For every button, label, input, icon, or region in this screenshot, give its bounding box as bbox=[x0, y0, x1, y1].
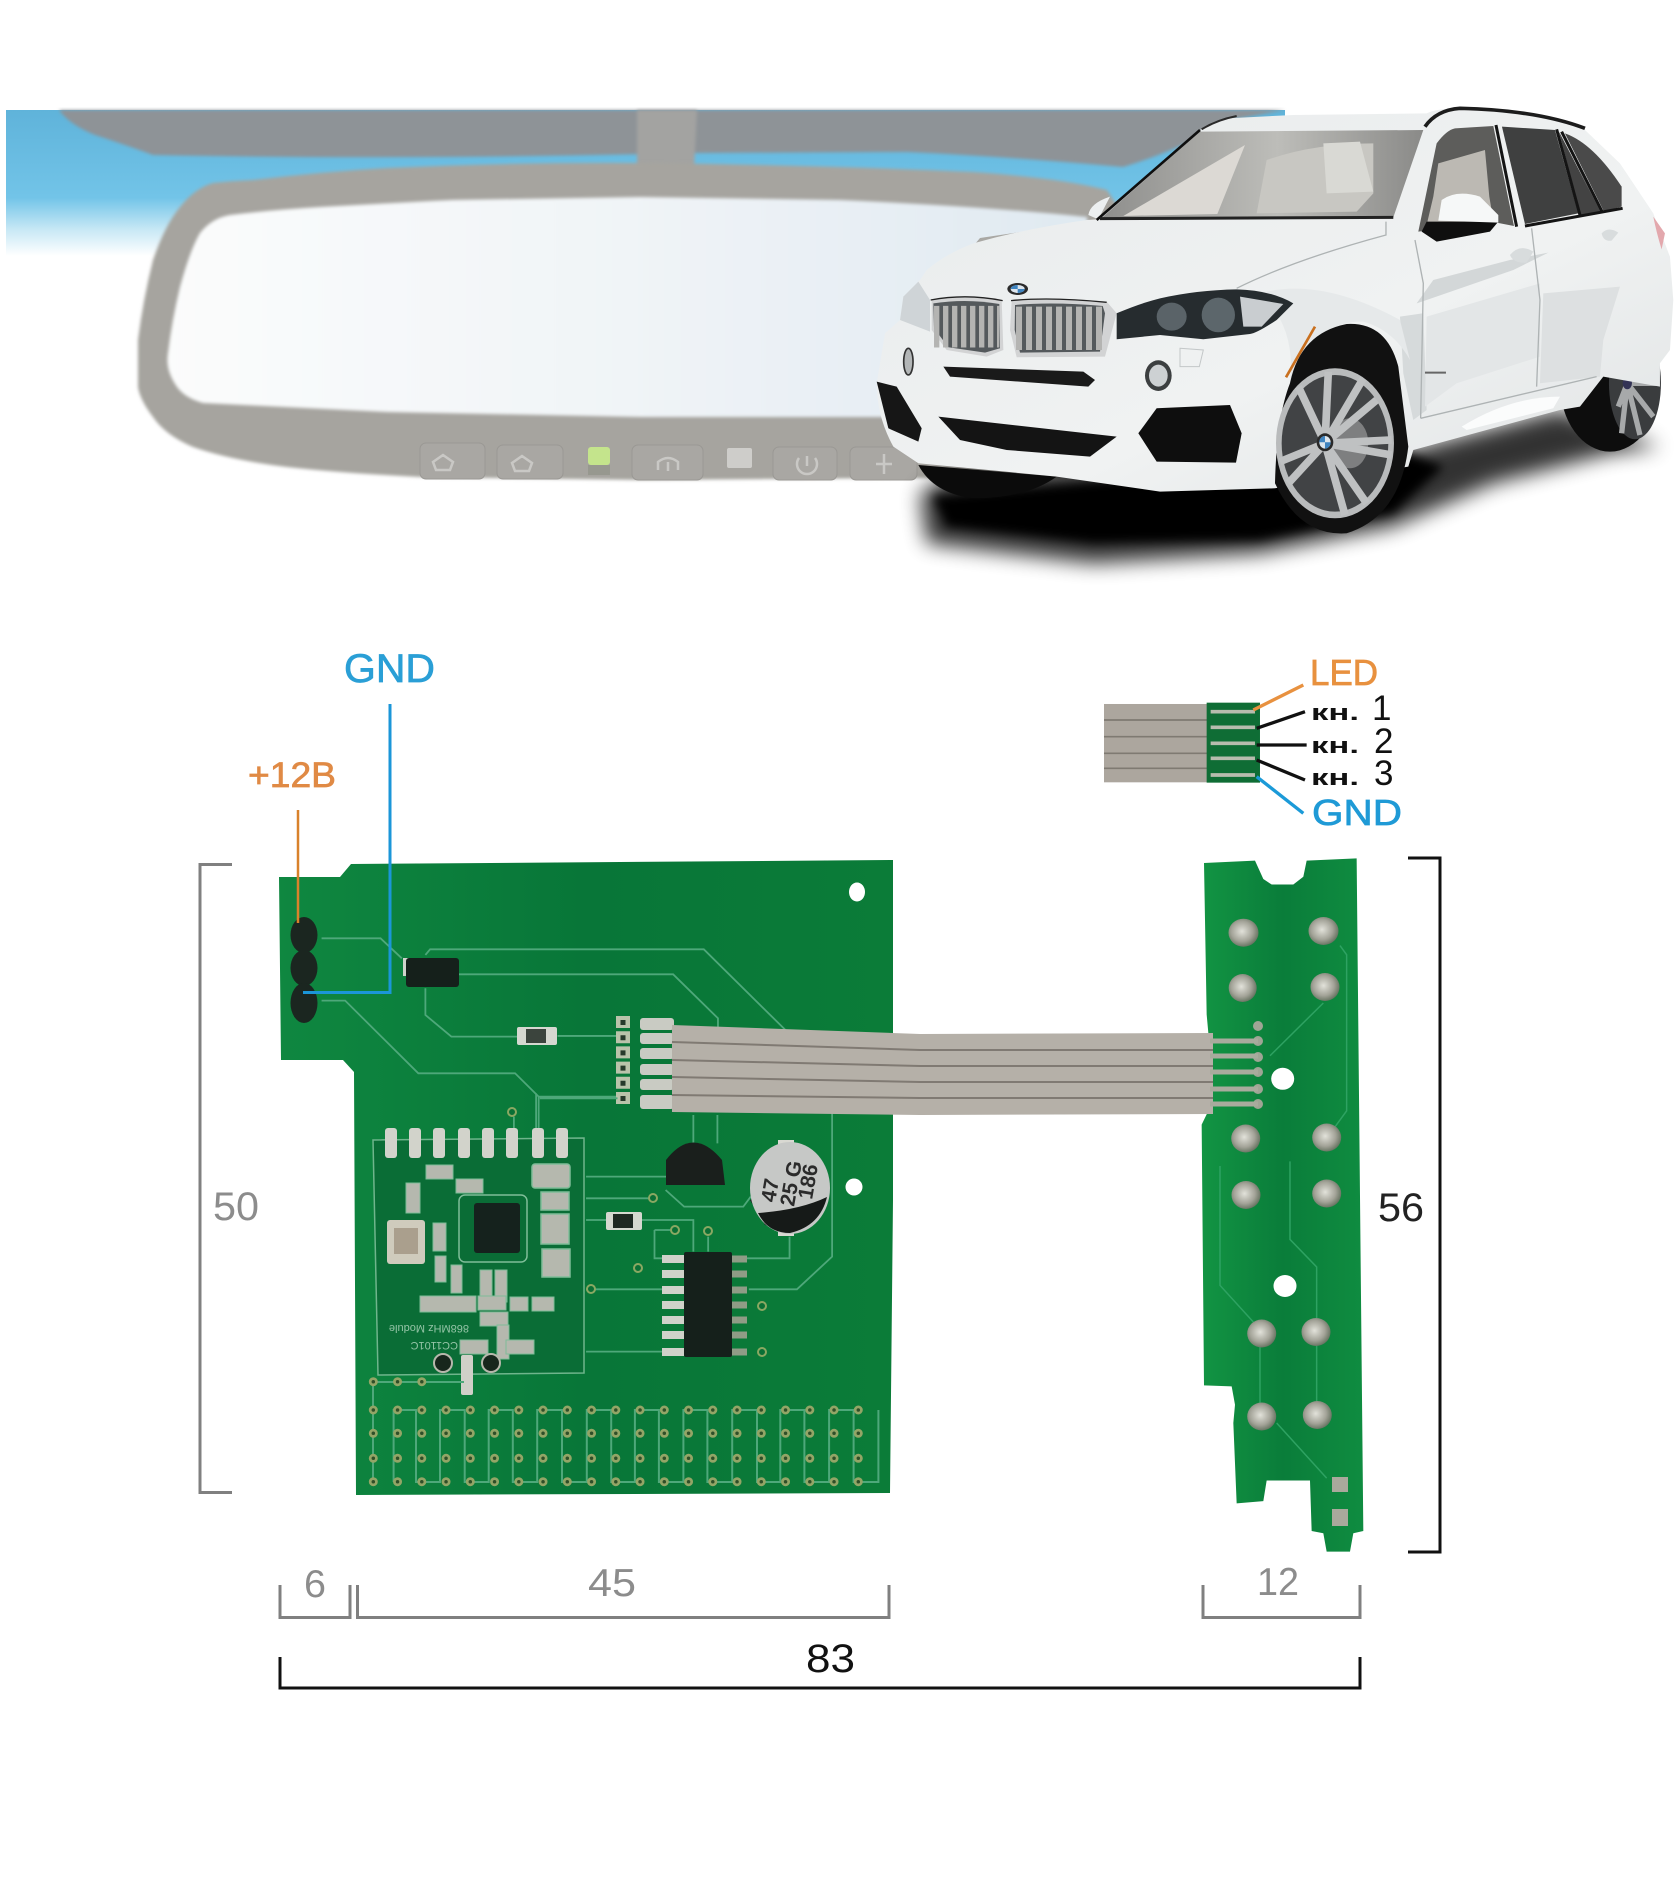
LED label: LED bbox=[1310, 652, 1378, 693]
height 50 label: 50 bbox=[213, 1185, 259, 1229]
pin leads bbox=[1253, 685, 1307, 813]
far front wheel bbox=[918, 465, 1057, 498]
diode bbox=[403, 958, 459, 987]
button 3 label: кн. bbox=[1311, 765, 1359, 790]
bracket width 12 bbox=[1203, 1585, 1360, 1618]
label 45: 45 bbox=[588, 1562, 636, 1605]
orange side marker bbox=[1286, 327, 1315, 377]
left headlamp bbox=[900, 282, 930, 332]
vias on lower board bbox=[508, 1108, 766, 1356]
button PCB bbox=[1202, 858, 1363, 1552]
lower centre grille bbox=[943, 367, 1095, 387]
module silk text: 868MHz Module bbox=[389, 1322, 469, 1334]
front wheel bbox=[1275, 324, 1408, 533]
left height bracket bbox=[200, 864, 232, 1492]
mirror buttons bbox=[420, 443, 917, 480]
car body bbox=[877, 108, 1673, 492]
module capacitors bbox=[532, 1164, 570, 1277]
side windows bbox=[1418, 125, 1623, 232]
solder blobs bbox=[640, 1018, 674, 1109]
GND label top: GND bbox=[344, 647, 435, 691]
mounting hole top bbox=[849, 882, 865, 902]
bracket width 45 bbox=[358, 1585, 889, 1618]
button solder pads bbox=[1228, 917, 1341, 1430]
lower board traces bbox=[514, 1093, 832, 1352]
right height bracket bbox=[1408, 858, 1440, 1552]
flat ribbon cable bbox=[672, 1025, 1258, 1115]
right air intake bbox=[1138, 405, 1242, 463]
SOIC-14 IC bbox=[662, 1252, 747, 1357]
mounting hole middle bbox=[846, 1178, 862, 1196]
main PCB bbox=[279, 860, 893, 1495]
rear wheel bbox=[1560, 315, 1661, 452]
button 2 label: кн. bbox=[1311, 733, 1359, 758]
RF module CC1101: CC1101C bbox=[410, 1339, 458, 1351]
height 56 label: 56 bbox=[1378, 1186, 1424, 1230]
left air intake bbox=[877, 382, 922, 442]
module edge pads bbox=[385, 1128, 568, 1158]
RF module CC1101 bbox=[373, 1128, 584, 1395]
+12V label: +12В bbox=[248, 756, 336, 795]
transistor TO-92 bbox=[666, 1142, 725, 1185]
button 1 label bbox=[1311, 689, 1391, 728]
antenna via grid bbox=[373, 1382, 879, 1482]
far side mirror bbox=[1088, 197, 1110, 219]
body shading bbox=[1180, 217, 1665, 430]
electrolytic capacitor: 186 bbox=[794, 1162, 823, 1201]
button holes bbox=[1271, 1068, 1296, 1297]
mirror stem bbox=[637, 110, 697, 170]
header: rear-view mirror photo bbox=[6, 110, 1285, 480]
upper board traces bbox=[322, 938, 789, 1130]
button board outline bbox=[1202, 858, 1363, 1552]
button 3 label: 3 bbox=[1374, 754, 1393, 793]
car: white BMW X5 bbox=[877, 108, 1673, 563]
central air intake bbox=[938, 417, 1117, 457]
mirror frame bbox=[138, 163, 1180, 480]
button board traces bbox=[1220, 946, 1347, 1478]
module bottom pads bbox=[434, 1354, 500, 1395]
antenna serpentine traces bbox=[373, 1382, 878, 1482]
button board solder column bbox=[1253, 1021, 1263, 1109]
far roof rail bbox=[1202, 116, 1237, 129]
button 2 label bbox=[1311, 722, 1393, 761]
mirror glass bbox=[167, 197, 1100, 417]
module SMD parts bbox=[406, 1165, 554, 1359]
ribbon stub bbox=[1104, 704, 1207, 782]
button 1 label: кн. bbox=[1311, 700, 1359, 725]
kidney grille right bbox=[1010, 299, 1117, 357]
bmw badge bbox=[1007, 283, 1028, 295]
electrolytic capacitor: 47 bbox=[757, 1177, 784, 1204]
electrolytic capacitor: 25 G bbox=[776, 1159, 807, 1208]
electrolytic capacitor bbox=[750, 1140, 830, 1236]
side mirror bbox=[1422, 194, 1498, 242]
GND label connector: GND bbox=[1312, 792, 1402, 833]
crystal bbox=[387, 1220, 425, 1264]
sky gradient background bbox=[6, 110, 1285, 256]
small smd resistor bbox=[517, 1027, 557, 1045]
dark contact shadow bbox=[933, 453, 1443, 543]
RF chip bbox=[459, 1195, 527, 1262]
button 3 label bbox=[1311, 754, 1393, 793]
kidney grille left bbox=[931, 296, 1003, 357]
+12V lead bbox=[297, 810, 299, 923]
car ground shadow bbox=[920, 410, 1660, 563]
board outline bbox=[279, 860, 893, 1495]
connector pcb piece bbox=[1207, 703, 1260, 783]
mirror frame right edge bbox=[970, 232, 1030, 250]
connector detail with pin labels bbox=[1104, 685, 1307, 813]
pin header +12V GND bbox=[290, 917, 318, 1023]
bottom contact pads bbox=[1332, 1477, 1348, 1526]
button 2 label: 2 bbox=[1374, 722, 1393, 761]
button 1 label: 1 bbox=[1372, 689, 1391, 728]
SMD resistor near capacitor bbox=[606, 1212, 642, 1230]
label 12: 12 bbox=[1257, 1561, 1299, 1604]
windshield bbox=[1097, 130, 1423, 220]
right fog light bbox=[1145, 360, 1172, 391]
ribbon solder joints right bbox=[1210, 1041, 1258, 1104]
label 83: 83 bbox=[806, 1637, 855, 1681]
bracket total width 83 bbox=[280, 1657, 1360, 1688]
bracket width 6 bbox=[280, 1585, 350, 1618]
label 6: 6 bbox=[304, 1563, 326, 1606]
roof rail bbox=[1425, 108, 1585, 128]
GND lead bbox=[303, 704, 390, 992]
sun visor bbox=[59, 110, 1285, 167]
header pads column bbox=[616, 1016, 630, 1106]
left fog light bbox=[904, 348, 913, 375]
right headlight bbox=[1117, 289, 1293, 339]
